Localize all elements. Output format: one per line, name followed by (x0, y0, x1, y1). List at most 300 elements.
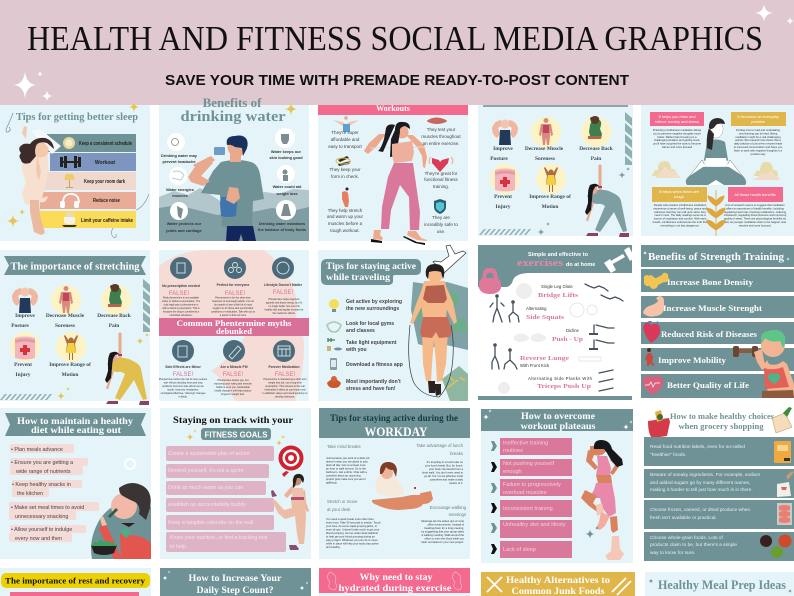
exercise labels: Dicline (566, 328, 580, 333)
benefit labels: Soreness (535, 156, 555, 162)
exercise labels: Triceps Push Up (537, 383, 591, 390)
tips list: with you (345, 347, 367, 353)
text blocks: you'll have acquired the tools to become (653, 142, 701, 146)
top myths: No prescription needed (162, 284, 200, 288)
text blocks: heading down for a long meeting, (424, 526, 464, 530)
diet tips: • Keep healthy snacks in (12, 482, 71, 488)
heading bar: Workouts (376, 104, 410, 113)
text blocks: hash out ideas for your next project. (421, 540, 464, 544)
text blocks: even sit-ups. It doesn't take much to get your (326, 528, 380, 532)
callout boxes: relieve anxiety and stress (655, 119, 699, 124)
lower myths: in libido. (179, 396, 188, 398)
benefit captions: They're great for (425, 171, 458, 176)
top myths: healthy diet and regular exercise for (265, 308, 304, 312)
exercise labels: Bridge Lifts (538, 292, 579, 299)
benefit labels: Improve Range of (529, 194, 571, 200)
benefit labels: Water keeps our (271, 149, 302, 154)
illustration: stretching woman in yellow (105, 334, 149, 405)
lower myths: prescription. This reduces to the real (265, 385, 305, 388)
panel: workout plateaus: enough (503, 469, 522, 475)
heading (338, 573, 452, 594)
subheads: at your desk (327, 507, 351, 512)
text blocks: calmness that they can call upon when they (654, 210, 707, 214)
target icon (278, 446, 304, 477)
subheads: Encourage walking (430, 505, 467, 510)
top myths: because the drug is considered a (163, 310, 200, 314)
benefit captions: easy to transport (328, 144, 363, 149)
heading ribbon (5, 413, 146, 436)
panel: active during the workday (319, 408, 470, 559)
header: exercises (517, 258, 563, 269)
sleep bands (37, 134, 136, 228)
benefit captions: functional fitness (424, 177, 459, 182)
diet tips: wide range of nutrients (15, 469, 71, 475)
illustration: man drinking (188, 136, 264, 241)
benefit labels (161, 149, 306, 233)
tips list: Take light equipment (346, 340, 397, 346)
benefit labels: Posture (11, 323, 29, 329)
text blocks: reactive and more focused. (739, 223, 771, 227)
panel: workout plateaus: Not pushing yourself (503, 461, 554, 467)
text blocks: gabbing). (326, 480, 337, 484)
heading (188, 574, 282, 596)
tips list: Get active by exploring (346, 299, 402, 305)
panel: healthy diet eating out (0, 408, 151, 559)
callout boxes: All those health benefits (734, 192, 776, 197)
benefit labels: Improve Range of (49, 362, 91, 368)
text blocks: People who practice mindfulness meditation (654, 203, 707, 207)
text blocks: positive way (751, 152, 766, 156)
band labels: Increase Muscle Strenght (663, 304, 762, 313)
heading: hydrated during exercise (338, 584, 452, 594)
panel: benefits of drinking water (159, 95, 309, 241)
band labels: Reduced Risk of Diseases (661, 330, 757, 339)
top myths: online or without a prescription. The (162, 300, 201, 303)
callout boxes: It helps when times are (659, 189, 699, 194)
benefit labels (490, 146, 613, 210)
map (411, 282, 468, 350)
benefit captions: an entire exercise. (423, 141, 459, 146)
illustration: meditating woman (686, 118, 746, 185)
benefit captions: form in check. (331, 174, 359, 179)
top myths: Lifestyle Doesn't Matter (264, 283, 303, 287)
sleep bands: Keep a consistent schedule (79, 141, 132, 147)
text blocks: everything is not that dangerous. (660, 223, 700, 227)
benefit captions: use. (437, 229, 445, 234)
lower myths: Phentermine boosts you, but (217, 379, 249, 382)
heading ribbon: How to maintain a healthy (17, 416, 134, 426)
top myths: FALSE! (273, 290, 294, 296)
dumbbell icon (604, 247, 635, 273)
text blocks: to improved concentration and helps you (734, 145, 783, 149)
icons: clock, dumbbell, lamp, headphones, coffee (60, 137, 81, 227)
text blocks: new learning can be hard. Being (739, 131, 778, 135)
subheads: Stretch or move (327, 499, 358, 504)
text blocks: Meetings are the status quo of most (421, 519, 464, 523)
benefit labels: Prevent (494, 194, 512, 200)
top myths: Phentermine helps suppress (269, 298, 300, 301)
band labels: Increase Bone Density (667, 278, 753, 287)
illustration: airplane (433, 245, 466, 273)
header: workout plateaus (520, 421, 596, 431)
lower myths: weight loss aid, not a long-term (268, 382, 302, 384)
header: Tips for staying active during the (330, 413, 458, 423)
lower myths: Forever Medication (268, 365, 300, 369)
panel: fitness goals (160, 408, 311, 559)
heading: Healthy Meal Prep Ideas (658, 577, 786, 592)
panel: workout plateaus: routines (503, 448, 523, 454)
panel: meal prep ideas (645, 572, 794, 596)
text blocks: while in place will help your body stay active (326, 542, 379, 546)
arrows (491, 441, 497, 554)
text blocks: an hour to walk around. Go to the (326, 466, 366, 470)
top myths: for people to lose a little bit of extra (214, 304, 253, 306)
text blocks: better. Rather than focusing on a (658, 135, 697, 139)
exercise labels: Alternating Side Planks With (528, 376, 593, 381)
text blocks: breath, mindfulness underscores the truth that (653, 220, 708, 224)
illustration: woman on one leg (271, 474, 309, 550)
benefit labels: Injury (16, 372, 31, 378)
benefit labels: prevent headache (162, 159, 196, 164)
header: WORKDAY (364, 424, 428, 439)
top myths: FALSE! (169, 291, 190, 297)
benefit icons (490, 116, 611, 194)
benefit labels: Posture (490, 156, 508, 162)
plateau bars (500, 438, 572, 558)
lower myths: problems Common side effects can be (162, 385, 204, 388)
exercise labels: Push - Up (552, 336, 583, 343)
top myths: treatment of overweight adults. It is not (212, 300, 254, 303)
exercise labels: With Front Kick (520, 363, 550, 368)
text blocks: Practicing mindfulness meditation allows (653, 128, 702, 132)
text blocks: challenging situation and getting stuck, (654, 138, 700, 142)
text blocks: coworkers and make a daily (430, 478, 464, 482)
panel: mindfulness benefits (641, 105, 794, 236)
goal pill (201, 428, 271, 440)
top myths (162, 283, 304, 317)
mountains (159, 188, 309, 241)
heading (180, 95, 286, 125)
top myths: no magic bullet. Get your full (269, 305, 300, 308)
tip bands: way to know for sure. (650, 550, 695, 556)
text blocks: meditation might be a real challenging (735, 135, 781, 139)
benefit captions: tough workout. (330, 228, 360, 233)
benefit labels: weight loss (275, 191, 298, 196)
panel: resistance band workouts (318, 104, 468, 245)
panel: fitness goals: Keep a tangible calendar on the wall (168, 520, 253, 526)
benefit labels: Drinking water maintains (259, 221, 305, 226)
benefit labels: Water could aid (273, 184, 302, 189)
tips list: Most importantly don't (346, 379, 401, 385)
benefit icons (10, 284, 131, 362)
benefit labels: Decrease Back (97, 313, 131, 319)
heading ribbon (4, 256, 146, 275)
text blocks: learn to work with negative thoughts in a (734, 148, 782, 152)
lower myths: FALSE! (275, 372, 296, 378)
banner (0, 0, 794, 105)
text blocks: calmer and more focused (662, 145, 693, 149)
illustration: jump rope woman (409, 264, 457, 397)
heading: drinking water (180, 109, 286, 125)
benefit labels: Improve (15, 313, 35, 319)
text blocks: It's tempting to sit and relax on (427, 460, 463, 464)
benefit labels: skin looking good (269, 155, 303, 160)
diet tips: the kitchen (17, 491, 43, 497)
lower myths: long-term weight loss. (221, 393, 245, 396)
heading: Healthy Alternatives to (506, 576, 610, 586)
heading: Benefits of (203, 95, 262, 110)
text blocks (653, 128, 787, 227)
text blocks: routine of it. (449, 481, 463, 485)
panel: phentermine myths (159, 250, 309, 401)
illustration: sleeping woman (19, 126, 61, 235)
list icons (327, 299, 342, 388)
illustration: woman eating (91, 483, 151, 559)
benefit labels: Pain (109, 323, 119, 329)
text blocks: activity. But research has shown that a (735, 138, 781, 142)
text blocks: short walk. You don't even need to (422, 470, 464, 474)
benefit captions: affordable and (331, 137, 360, 142)
heading pill: The importance of rest and recovery (5, 576, 146, 586)
band labels: Improve Mobility (658, 356, 726, 365)
text blocks: desk all day. Get up at least once (326, 463, 366, 467)
goal pill: FITNESS GOALS (205, 430, 267, 440)
text blocks (326, 456, 465, 549)
panel: stay hydrated (319, 568, 470, 596)
heading: when grocery shopping (678, 421, 764, 431)
top myths: only legal way to phentermine is (164, 304, 199, 306)
text blocks: office environments. Instead of (427, 522, 464, 526)
text blocks: project (just make sure you aren't (326, 477, 366, 481)
text blocks: Finding time to read and undertaking (736, 128, 780, 132)
text blocks: your lunch break. But, for lunch, (425, 464, 463, 468)
panel: fitness goals: establish an accountability buddy (168, 502, 246, 508)
panel: workout plateaus (481, 409, 633, 563)
lower myths: in addiction values and result tendency to (263, 392, 308, 395)
heading: How to make healthy choices (670, 411, 775, 421)
benefit captions: muscles throughout (421, 134, 461, 139)
top myths: FALSE! (225, 291, 246, 297)
lower myths: FALSE! (223, 372, 244, 378)
lower myths: habits is up to you. Sustainable (216, 386, 251, 389)
text blocks: your body can benefit from a (429, 467, 464, 471)
benefit labels: Decrease Back (579, 146, 613, 152)
text blocks: your toes, do some squat jumping jacks, or (326, 524, 377, 528)
subheads (327, 443, 467, 517)
heading ribbon: The importance of stretching (10, 262, 140, 272)
tip bands: Choose whole-grain foods. Lots of (650, 535, 723, 541)
benefit labels: Water protects our (167, 221, 202, 226)
sparkles (7, 102, 139, 227)
exercise labels: Reverse Lunge (520, 355, 569, 362)
callout boxes: tough (674, 194, 684, 199)
benefit captions (327, 127, 461, 234)
band labels (658, 278, 762, 390)
top myths: appetite and boost energy, but it's (266, 302, 303, 304)
panel: healthy grocery choices (644, 407, 794, 561)
diet tips: unnecessary snacking (15, 514, 68, 520)
top myths: weight nor for those with uncontrolled (213, 307, 254, 310)
text blocks: go far. For it to be effective invite (424, 474, 463, 478)
heading: Benefits of Strength Training (648, 252, 784, 263)
kettlebell icon (479, 268, 501, 294)
band icons (760, 441, 794, 558)
lower myths: constipation/diarrhea, "alterings" changes (161, 392, 206, 395)
diet tips: • Make set meal times to avoid (11, 505, 84, 511)
lower myths: develop tolerance. (275, 396, 295, 398)
text blocks: A lot of research seems to suggest that meditation (725, 203, 785, 207)
benefit labels: Pain (591, 156, 601, 162)
panel: benefits of strength training (641, 245, 794, 398)
top myths: controlled substance. (169, 314, 193, 317)
tip bands: products claim to be, but there's a simple (650, 542, 737, 548)
top myths: Phentermine is for the short-term (215, 296, 251, 300)
text blocks: and healthy. (326, 545, 341, 549)
top myths: with a doctor's prescription. This is (162, 307, 200, 310)
exercise labels: Single Leg Glute (541, 284, 573, 289)
benefit captions: training. (433, 184, 449, 189)
text blocks: experience a sense of well-being, peace and (653, 206, 707, 210)
text blocks: blood pumping. Get an under-desk elliptical (326, 531, 378, 535)
benefit captions: They help stretch (328, 208, 363, 213)
exercise figures (490, 284, 623, 391)
lower myths: Side Effects are Minor (165, 365, 201, 369)
illustration: suitcase (442, 366, 468, 401)
exercise labels (520, 284, 593, 390)
header (319, 408, 470, 439)
header: do at home (566, 262, 595, 268)
icon: shopping basket (648, 410, 670, 438)
lower myths: Phentermine carries the risk of some serious (159, 378, 208, 381)
panel: fitness goals: Remind yourself, it's not a sprint (168, 468, 244, 474)
subheads: breaks (450, 451, 463, 456)
benefit labels: Motion (62, 372, 78, 378)
text blocks: coworker about an upcoming (326, 474, 361, 478)
tips list: the new surroundings (346, 306, 399, 312)
tip bands: Choose frozen, canned, or dried produce when (650, 507, 750, 513)
text blocks: Just because you work at a desk job (326, 456, 370, 460)
lower myths: health change is still help produce (215, 390, 252, 392)
heading bar (318, 104, 468, 115)
subheads: Take advantage of lunch (416, 443, 464, 448)
callout boxes: It helps you relax and (659, 114, 695, 119)
benefit labels: Soreness (55, 323, 75, 329)
panel: staying active while traveling (318, 245, 468, 401)
subtitle: SAVE YOUR TIME WITH PREMADE READY-TO-POST CONTENT (165, 72, 629, 89)
tip bands: "healthier" foods. (650, 452, 686, 458)
subheads: meetings (449, 512, 466, 517)
tips list: Look for local gyms (346, 321, 394, 327)
top myths: the maximum effects. (272, 312, 296, 315)
text blocks: office or even the block while you (424, 536, 464, 540)
goal bars (166, 446, 286, 552)
text blocks: well, as younger meditators claim to be happier, less (724, 220, 787, 224)
panel: rest and recovery (0, 568, 151, 596)
sleep bands: Keep your room dark (84, 179, 125, 185)
benefit labels: Water energies (166, 187, 194, 192)
band labels: Better Quality of Life (667, 381, 750, 390)
panel: workout plateaus: Failure to progressively (503, 482, 561, 488)
text blocks: doesn't mean you are glued to your (326, 460, 368, 464)
illustration: running woman (581, 440, 624, 560)
text blocks: You need a quick break more often than (326, 517, 374, 521)
heading: while traveling (326, 272, 391, 282)
text blocks: quality of sleep. There are psychological benefits as (724, 217, 786, 221)
icon: grocery bag (772, 413, 792, 433)
exercise labels: Alternating (526, 306, 547, 311)
heading: Tips for staying active (326, 261, 416, 271)
panel: fitness goals: Create a sustainable plan of action (168, 451, 250, 457)
icons (333, 116, 453, 214)
exercise labels: Side Squats (526, 314, 565, 321)
lower myths: FALSE! (173, 372, 194, 378)
tips list: stress and have fun! (346, 386, 396, 392)
badges (170, 257, 295, 362)
diet tips: every now and then (15, 536, 62, 542)
text blocks: to help get your blood pumping during an (326, 534, 375, 538)
diet tips: • Allow yourself to indulge (11, 527, 72, 533)
header: How to overcome (521, 411, 595, 421)
heading: Why need to stay (360, 573, 433, 583)
callout boxes: It becomes an everyday (737, 114, 779, 119)
lower myths: Phentermine is intended as a short term (263, 378, 307, 381)
panel: workout plateaus: Ineffective training (503, 440, 548, 446)
benefit captions: They're super (331, 130, 359, 135)
band icons (643, 273, 669, 395)
tip bands: making it harder to tell just how much is in there. (650, 487, 753, 493)
benefit captions: incredibly safe to (424, 222, 458, 227)
illustration: woman with dumbbell (733, 330, 794, 398)
text blocks: every hour. Take 30 seconds to stretch. Touch (326, 520, 381, 524)
benefit captions: They keep your (329, 167, 361, 172)
header (481, 409, 633, 431)
benefit labels: joints and cartilage (165, 228, 203, 233)
heading (321, 259, 421, 285)
heading: Daily Step Count? (196, 586, 274, 596)
panel: fitness goals: to help (170, 544, 186, 550)
faint weights (498, 283, 601, 394)
tip bands (644, 437, 794, 561)
panel: fitness goals: Drink as much water as you can (168, 485, 243, 491)
panel: daily step count (160, 568, 311, 596)
top myths: conditions or medication. Talk with you to (211, 310, 256, 314)
heading: How to Increase Your (188, 574, 282, 584)
text blocks: offers an assortment of health benefits, including (726, 206, 784, 210)
subheads: Take mind breaks (327, 444, 361, 449)
lower myths: side effects including heart and lung (164, 382, 203, 384)
panel: exercises at home (478, 245, 635, 400)
diet tips (9, 444, 99, 542)
callout boxes (650, 112, 786, 202)
lower myths (159, 365, 308, 398)
benefit labels: Motion (542, 204, 558, 210)
benefit labels: Decrease Muscle (46, 313, 85, 319)
top myths: Real phentermine is not available (163, 296, 200, 300)
tip bands: Read food nutrition labels, even for so-called (650, 444, 745, 450)
heading pill (1, 573, 150, 588)
myths band (159, 318, 309, 336)
heading: Staying on track with your (173, 416, 294, 426)
panel: fitness goals: Know your nutrition, or find a tracking tool (170, 535, 267, 541)
top myths: a doctor to find out more (220, 314, 247, 317)
header: Simple and effective to (528, 252, 589, 258)
myths band: Common Phentermine myths (176, 318, 292, 328)
heading: Tips for getting better sleep (16, 112, 138, 123)
benefit labels: Drinking water may (161, 153, 198, 158)
text blocks: you to perceive negative thoughts much (653, 131, 701, 135)
tips list: and classes (346, 328, 375, 334)
illustration: woman at desk (372, 462, 433, 510)
